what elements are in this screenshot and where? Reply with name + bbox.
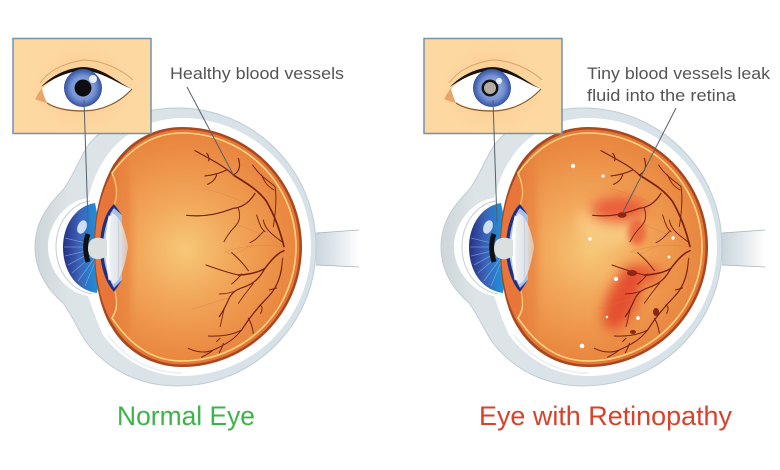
heading: normal eye: Normal Eye bbox=[117, 401, 255, 431]
label: tiny blood vessels leak: Tiny blood vessels leak bbox=[587, 64, 771, 83]
panel: normal eye bbox=[13, 38, 359, 431]
label: tiny blood vessels leak: fluid into the retina bbox=[587, 86, 737, 105]
white exudate spots bbox=[571, 164, 675, 348]
hemorrhage blotches bbox=[578, 196, 662, 335]
aneurysms bbox=[618, 212, 659, 334]
leader line: eye view to iris bbox=[84, 100, 88, 222]
panel: eye with retinopathy bbox=[424, 38, 771, 431]
leader line: leak bbox=[623, 108, 676, 212]
leader line: healthy blood vessels bbox=[187, 87, 234, 176]
panel: front view of normal eye bbox=[13, 38, 151, 134]
icon: cross-section of retinopathy eye bbox=[441, 108, 765, 386]
label: healthy blood vessels: Healthy blood vessels bbox=[170, 64, 344, 83]
icon: cross-section of normal eye bbox=[35, 108, 359, 386]
panel: front view of retinopathy eye bbox=[424, 38, 562, 134]
heading: eye with retinopathy: Eye with Retinopathy bbox=[479, 401, 733, 431]
leader line: eye view to iris bbox=[493, 100, 497, 222]
